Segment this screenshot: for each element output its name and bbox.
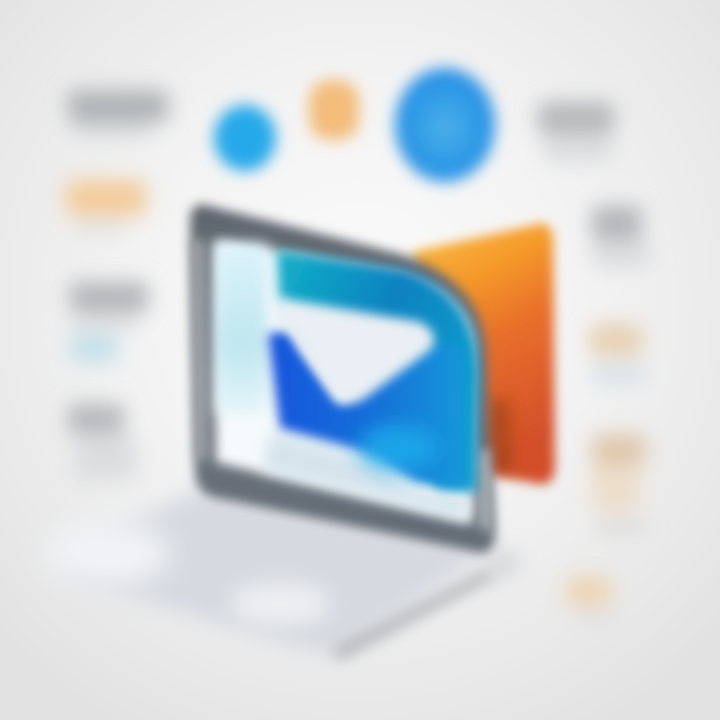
centre trackpad highlight bbox=[230, 582, 330, 626]
left text block 4 bbox=[68, 404, 136, 480]
right text block 3: orange bbox=[590, 324, 646, 384]
envelope lower glow bbox=[358, 424, 438, 472]
right text block 2 bbox=[592, 206, 650, 268]
envelope body bbox=[268, 330, 466, 488]
left text block 1 bbox=[68, 90, 168, 136]
right text block 5: orange bbox=[566, 576, 614, 622]
envelope bbox=[268, 298, 466, 488]
icon: orange rounded badge bbox=[309, 80, 359, 140]
laptop screen display bbox=[215, 240, 474, 524]
orange panel dark shade next to the frame bbox=[488, 400, 512, 475]
light band below the mail bbox=[262, 432, 470, 520]
left text block 3 bbox=[70, 282, 148, 362]
laptop screen frame bbox=[190, 205, 495, 553]
base front edge shadow bbox=[330, 568, 494, 660]
right text block 4: orange bbox=[592, 434, 646, 534]
icon: large blue circle bbox=[395, 68, 495, 182]
light blue window strip bbox=[216, 244, 268, 414]
envelope flap bbox=[272, 298, 434, 403]
frame lighter lower right edge bbox=[477, 450, 492, 530]
soft shadow right of laptop bbox=[490, 548, 525, 585]
left text block 2: orange bbox=[66, 180, 146, 234]
icon: cyan circle bbox=[214, 105, 276, 171]
orange folder panel behind the screen bbox=[412, 224, 555, 484]
teal mail panel bbox=[277, 250, 478, 492]
frame lighter left edge bbox=[192, 240, 207, 460]
laptop keyboard base bbox=[46, 490, 494, 660]
right text block 1 bbox=[538, 102, 614, 162]
left trackpad highlight bbox=[46, 521, 170, 585]
